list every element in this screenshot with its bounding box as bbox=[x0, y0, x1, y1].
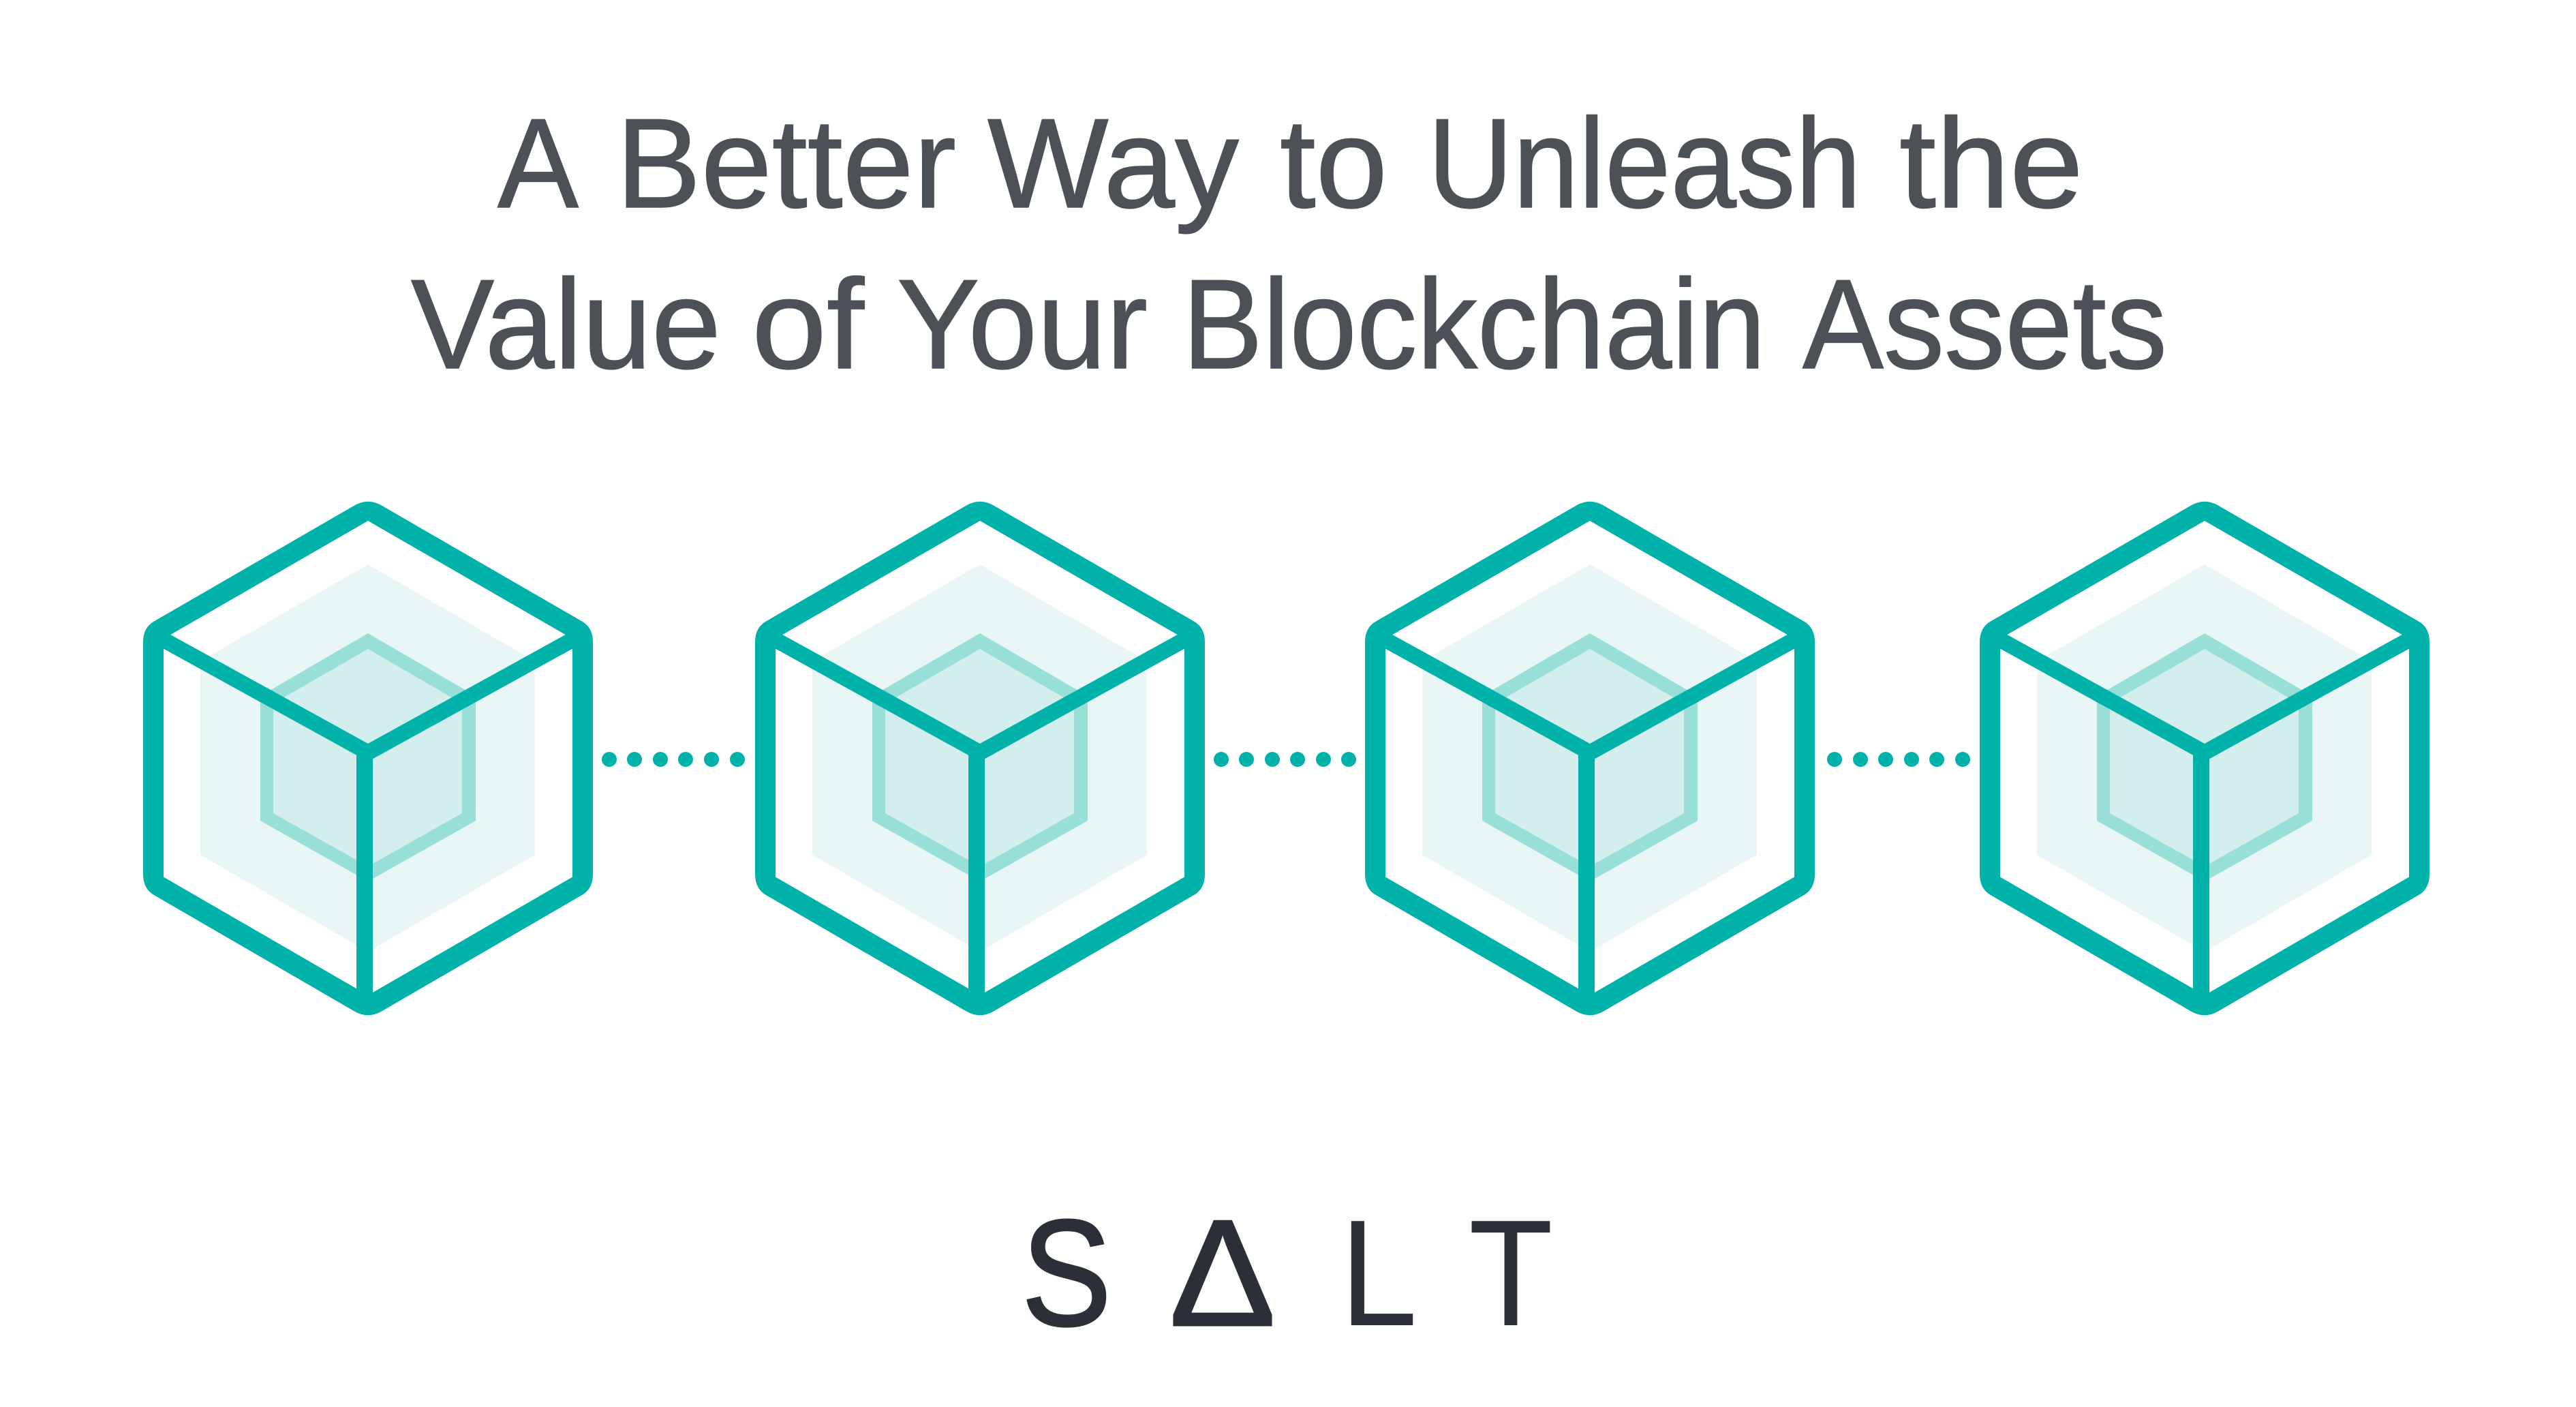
logo: SALT wordmark: T bbox=[1469, 1189, 1553, 1358]
title: Your bbox=[897, 253, 1148, 395]
icon: blockchain cube 3 bbox=[1365, 502, 1815, 1015]
title: Value bbox=[411, 253, 721, 395]
title: A bbox=[497, 92, 579, 234]
title: the bbox=[1899, 92, 2083, 234]
logo: SALT wordmark bbox=[1022, 1189, 1553, 1358]
title: Assets bbox=[1803, 253, 2167, 395]
icon: blockchain cube 4 bbox=[1980, 502, 2429, 1015]
title: Way bbox=[987, 92, 1240, 234]
icon: blockchain cube 1 bbox=[143, 502, 593, 1015]
title: Blockchain bbox=[1182, 253, 1766, 395]
title: of bbox=[752, 253, 865, 395]
logo: SALT wordmark: S bbox=[1022, 1189, 1111, 1358]
connector dots 2 bbox=[1214, 752, 1356, 767]
title: Better bbox=[616, 92, 956, 234]
title bbox=[411, 92, 2167, 395]
connector dots 1 bbox=[602, 752, 745, 767]
title: Unleash bbox=[1428, 92, 1861, 234]
title: to bbox=[1280, 92, 1387, 234]
logo: SALT wordmark: L bbox=[1340, 1189, 1417, 1358]
icon: blockchain cube 2 bbox=[755, 502, 1205, 1015]
logo: SALT wordmark: Δ bbox=[1169, 1189, 1276, 1358]
connector dots 3 bbox=[1827, 752, 1970, 767]
